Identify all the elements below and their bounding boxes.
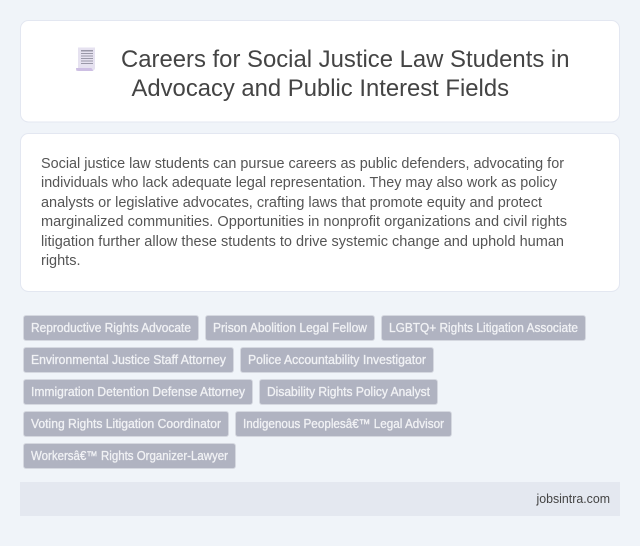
- tag: Police Accountability Investigator: [240, 348, 434, 372]
- tag: Workers Rights Organizer-Lawyer: Workersâ€™ Rights Organizer-Lawyer: [31, 449, 228, 463]
- tag: Prison Abolition Legal Fellow: Prison Abolition Legal Fellow: [213, 321, 368, 335]
- tag: Disability Rights Policy Analyst: Disability Rights Policy Analyst: [267, 385, 430, 399]
- text block: description: rights.: [41, 252, 80, 269]
- tag: Police Accountability Investigator: Police Accountability Investigator: [248, 353, 426, 367]
- text block: description: analysts or legislative advocates, crafting laws that promote equity and protect: [41, 194, 543, 211]
- title: Advocacy and Public Interest Fields: [132, 75, 509, 102]
- tag: LGBTQ+ Rights Litigation Associate: LGBTQ+ Rights Litigation Associate: [389, 321, 578, 335]
- tag: Reproductive Rights Advocate: Reproductive Rights Advocate: [31, 321, 191, 335]
- panel: header: [20, 20, 620, 122]
- tag: Voting Rights Litigation Coordinator: [24, 412, 228, 436]
- tag: Environmental Justice Staff Attorney: [24, 348, 234, 372]
- tag: Indigenous Peoples Legal Advisor: [236, 412, 452, 436]
- tag: LGBTQ+ Rights Litigation Associate: [382, 316, 586, 340]
- panel: description: [20, 134, 620, 292]
- text block: description: [41, 155, 567, 269]
- tag: Reproductive Rights Advocate: [24, 316, 198, 340]
- text block: description: individuals who lack adequate legal representation. They may also work as policy: [41, 174, 557, 191]
- tag: Environmental Justice Staff Attorney: Environmental Justice Staff Attorney: [31, 353, 227, 367]
- text block: description: marginalized communities. Opportunities in nonprofit organizations and civil rights: [41, 213, 567, 230]
- text block: description: Social justice law students can pursue careers as public defenders, advocating for: [41, 155, 564, 172]
- tag: Immigration Detention Defense Attorney: [24, 380, 252, 404]
- tag: Prison Abolition Legal Fellow: [206, 316, 374, 340]
- footer: [20, 482, 620, 516]
- tag: Immigration Detention Defense Attorney: Immigration Detention Defense Attorney: [31, 385, 246, 399]
- tag: Voting Rights Litigation Coordinator: Voting Rights Litigation Coordinator: [31, 417, 221, 431]
- tag: Disability Rights Policy Analyst: [260, 380, 438, 404]
- tag list: [24, 316, 586, 468]
- text block: description: litigation further allow these students to drive systemic change and uphold human: [41, 233, 564, 250]
- title: [121, 46, 570, 102]
- tag: Indigenous Peoples Legal Advisor: Indigenous Peoplesâ€™ Legal Advisor: [243, 417, 444, 431]
- title: Careers for Social Justice Law Students in: [121, 46, 570, 73]
- footer text: jobsintra.com: [536, 492, 610, 506]
- icon: document scroll: [76, 48, 95, 71]
- tag: Workers Rights Organizer-Lawyer: [24, 444, 236, 468]
